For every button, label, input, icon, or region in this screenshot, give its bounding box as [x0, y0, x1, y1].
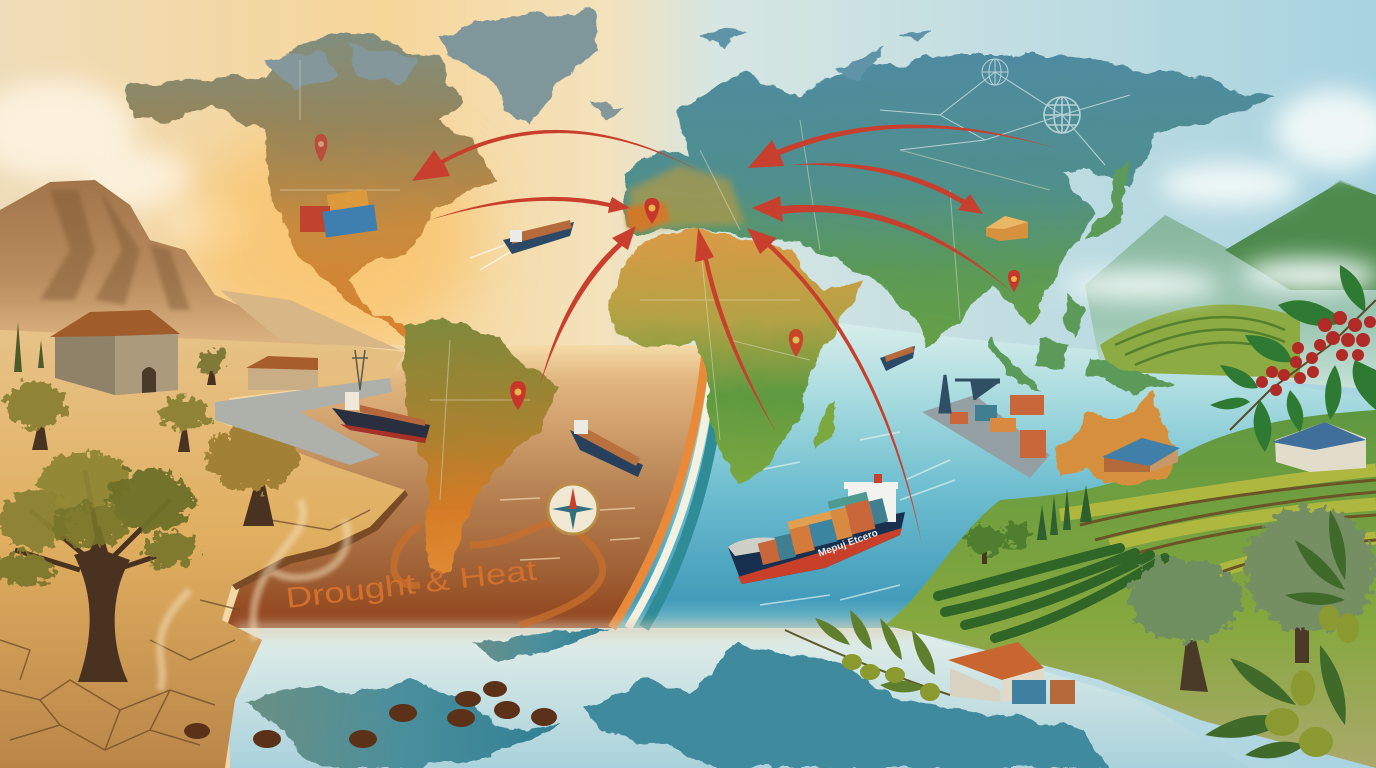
- ship south Atlantic: [570, 420, 643, 477]
- map pins: [315, 134, 1020, 410]
- border lines: [280, 60, 1050, 500]
- containers on North America: [300, 189, 378, 237]
- mid olive tree: [207, 426, 299, 526]
- warehouse hillside: [1272, 422, 1366, 472]
- ship near Brazil pier: [332, 392, 430, 443]
- arrow: Vietnam to Europe: [752, 196, 1012, 292]
- small tree 3: [196, 350, 226, 385]
- pylon: [352, 350, 368, 390]
- Europe warm tint: [628, 165, 745, 230]
- terraced fields right: [1060, 470, 1376, 580]
- olive trees left: [0, 322, 299, 682]
- cracked earth: [0, 510, 370, 750]
- olive branch centre: [785, 610, 950, 701]
- ship mid Atlantic: [503, 220, 574, 254]
- lower map sea: [225, 628, 1250, 768]
- coffee cherries: [1256, 311, 1376, 396]
- barn left: [246, 356, 318, 390]
- olive tree foreground: [1129, 558, 1241, 692]
- coffee beans: [184, 681, 557, 748]
- Arctic islands: [700, 30, 935, 80]
- Australia: [1055, 395, 1175, 485]
- ocean current stripes: [612, 300, 726, 628]
- North America: [130, 30, 497, 338]
- heat swirls: [160, 500, 347, 690]
- warehouse foreground: [948, 642, 1075, 704]
- pin: Brazil: [510, 381, 526, 410]
- arrow: Brazil to Spain: [540, 226, 636, 385]
- arrow: Ship to Europe: [747, 228, 922, 545]
- trees right: [965, 485, 1376, 692]
- left drought land: [0, 305, 408, 768]
- warehouse in China: [986, 216, 1028, 241]
- pin: Vietnam: [1008, 270, 1020, 292]
- arrow: Europe to North America: [412, 130, 697, 181]
- coffee branch: [1210, 265, 1376, 452]
- clouds left: [0, 80, 250, 250]
- Eurasia: [625, 55, 1272, 345]
- Asian islands: [988, 160, 1175, 395]
- ship name: Mepuj Etcero: [817, 528, 880, 560]
- Canadian islands: [265, 45, 622, 118]
- compass: [548, 484, 598, 534]
- heading: Drought and Heat: Drought & Heat: [284, 555, 538, 615]
- large olive tree: [0, 452, 196, 682]
- Greenland: [440, 12, 598, 125]
- wave streaks: [470, 245, 955, 605]
- arrow: Asia to Europe: [748, 124, 1055, 168]
- pin: Spain: [644, 198, 660, 224]
- ship Indian Ocean: [880, 346, 915, 371]
- mountains left: [0, 180, 400, 350]
- containers: [752, 488, 891, 565]
- right green land: [885, 410, 1376, 768]
- stone farmhouse: [50, 310, 180, 395]
- trade arrows: [412, 124, 1055, 545]
- drought ocean: [225, 345, 710, 632]
- olive tree far right: [1244, 508, 1376, 663]
- pin: East Africa: [789, 329, 803, 357]
- South America: [402, 315, 560, 570]
- glow behind the Americas: [180, 130, 480, 350]
- small tree 1: [6, 382, 66, 450]
- orange ocean swirls: [394, 520, 603, 625]
- network globe and lines: [880, 59, 1130, 165]
- clouds right: [1060, 90, 1376, 299]
- pin: North America: [315, 134, 327, 162]
- arrow: North America to Spain: [430, 197, 630, 220]
- cypresses: [14, 322, 44, 372]
- pier left: [215, 378, 392, 465]
- Spain: [625, 202, 670, 232]
- arrow: Southern Africa to Europe: [695, 228, 776, 432]
- Africa: [608, 228, 865, 485]
- lower map continents: [245, 628, 1110, 768]
- olive branch lower right: [1205, 510, 1359, 758]
- soft shoreline between oceans and lower map: [235, 624, 915, 636]
- vineyards: [938, 548, 1165, 638]
- warehouse Australia: [1102, 438, 1180, 472]
- main container ship: [728, 474, 905, 584]
- blue ocean: [610, 300, 1376, 640]
- arrow: Europe to China: [790, 163, 983, 214]
- Madagascar: [812, 402, 835, 450]
- port right: [922, 375, 1050, 478]
- right hills: [1085, 180, 1376, 390]
- small tree 2: [159, 397, 209, 452]
